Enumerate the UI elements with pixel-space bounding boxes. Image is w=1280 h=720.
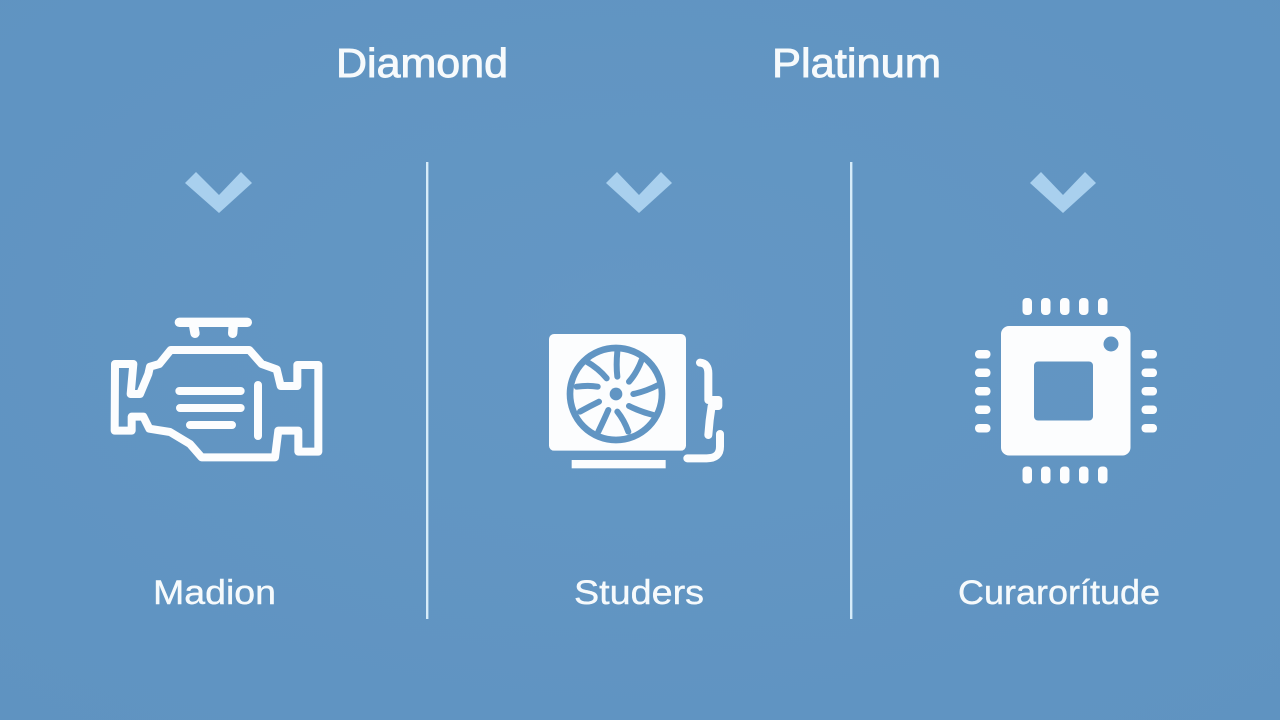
fan hub <box>610 388 622 400</box>
base bar <box>572 460 666 468</box>
icon: cooling fan unit <box>549 334 720 468</box>
divider: right <box>850 162 852 619</box>
fan wheel <box>570 348 662 440</box>
chip notch dot <box>1104 336 1118 352</box>
heading: Platinum: Platinum <box>772 40 941 86</box>
divider: left <box>426 162 428 619</box>
icon: microchip <box>975 298 1157 484</box>
icon: engine <box>115 322 318 457</box>
engine outline <box>115 350 318 457</box>
heading: Diamond: Diamond <box>336 40 508 86</box>
left pins <box>975 350 990 432</box>
chevron: column 3 <box>1030 172 1096 213</box>
label: Madion: Madion <box>153 574 276 612</box>
engine top bracket <box>179 322 247 333</box>
right pins <box>1142 350 1157 432</box>
side pipes <box>687 363 720 458</box>
chevron: column 2 <box>606 172 672 213</box>
label: Studers: Studers <box>574 574 704 612</box>
label: Curarorítude: Curarorítude <box>958 574 1160 612</box>
bottom pins <box>1022 466 1108 484</box>
engine inner lines <box>179 385 258 436</box>
chip body <box>1001 326 1130 456</box>
top pins <box>1022 298 1108 315</box>
fan housing <box>549 334 686 451</box>
chevron: column 1 <box>185 172 252 213</box>
